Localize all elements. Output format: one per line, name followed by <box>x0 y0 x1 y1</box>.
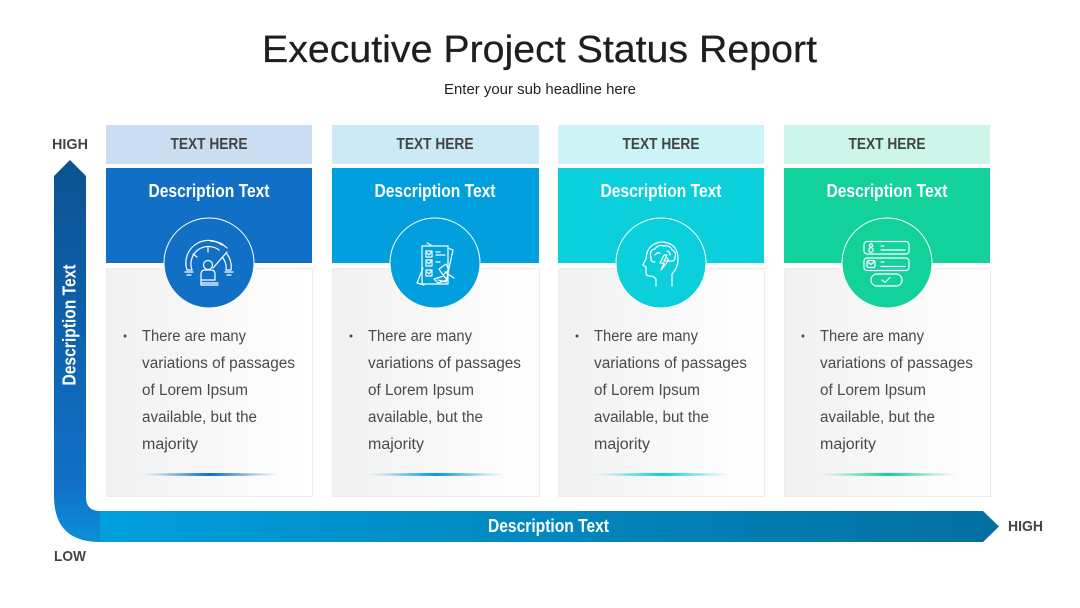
bullet text: available, but the <box>368 409 483 426</box>
bullet text: There are many <box>820 328 924 345</box>
panel: column 1 <box>106 125 312 496</box>
bullet text <box>802 328 973 453</box>
header tab: TEXT HERE <box>170 136 248 153</box>
bullet text: variations of passages <box>594 355 747 372</box>
icon: head with brain and lightning <box>616 218 706 308</box>
bullet text: majority <box>368 436 424 453</box>
body card <box>558 268 764 496</box>
bullet text: There are many <box>594 328 698 345</box>
colored banner: Description Text <box>148 181 270 201</box>
bullet text <box>350 328 521 453</box>
bullet text: available, but the <box>594 409 709 426</box>
colored banner <box>332 168 539 263</box>
header tab <box>558 125 764 164</box>
bullet text: There are many <box>142 328 246 345</box>
bullet text: of Lorem Ipsum <box>820 382 926 399</box>
bullet text: majority <box>594 436 650 453</box>
bullet text: of Lorem Ipsum <box>142 382 248 399</box>
header tab: TEXT HERE <box>848 136 926 153</box>
body card <box>106 268 312 496</box>
icon: checklist with gavel <box>390 218 480 308</box>
horizontal axis arrow <box>100 511 999 542</box>
bullet text: of Lorem Ipsum <box>594 382 700 399</box>
header tab: TEXT HERE <box>622 136 700 153</box>
body card <box>784 268 990 496</box>
bullet text: majority <box>820 436 876 453</box>
header tab: TEXT HERE <box>396 136 474 153</box>
panel: column 2 <box>332 125 540 496</box>
bullet text: variations of passages <box>368 355 521 372</box>
horizontal axis label: Description Text <box>488 516 609 536</box>
colored banner <box>784 168 990 263</box>
panel: column 3 <box>558 125 764 496</box>
bullet text: available, but the <box>820 409 935 426</box>
vertical axis label: Description Text <box>60 264 80 386</box>
bullet text: available, but the <box>142 409 257 426</box>
accent line <box>140 473 280 476</box>
accent line <box>366 473 506 476</box>
axis label: high, horizontal: HIGH <box>1008 518 1043 535</box>
colored banner <box>106 168 312 263</box>
bullet text <box>124 328 295 453</box>
accent line <box>592 473 732 476</box>
colored banner: Description Text <box>600 181 722 201</box>
axis label: high, vertical: HIGH <box>52 136 88 153</box>
colored banner: Description Text <box>826 181 948 201</box>
header tab <box>106 125 312 164</box>
icon: gauge with person <box>164 218 254 308</box>
bullet text: majority <box>142 436 198 453</box>
vertical axis arrow <box>54 160 100 542</box>
colored banner <box>558 168 764 263</box>
subtitle: Enter your sub headline here <box>444 82 636 98</box>
header tab <box>784 125 990 164</box>
panel: column 4 <box>784 125 990 496</box>
bullet text: of Lorem Ipsum <box>368 382 474 399</box>
bullet text: There are many <box>368 328 472 345</box>
colored banner: Description Text <box>374 181 496 201</box>
bullet text <box>576 328 747 453</box>
axis label: low: LOW <box>54 548 87 565</box>
title: Executive Project Status Report <box>262 29 817 71</box>
icon: form fields with check <box>842 218 932 308</box>
body card <box>332 268 540 496</box>
bullet text: variations of passages <box>820 355 973 372</box>
bullet text: variations of passages <box>142 355 295 372</box>
accent line <box>818 473 958 476</box>
header tab <box>332 125 539 164</box>
